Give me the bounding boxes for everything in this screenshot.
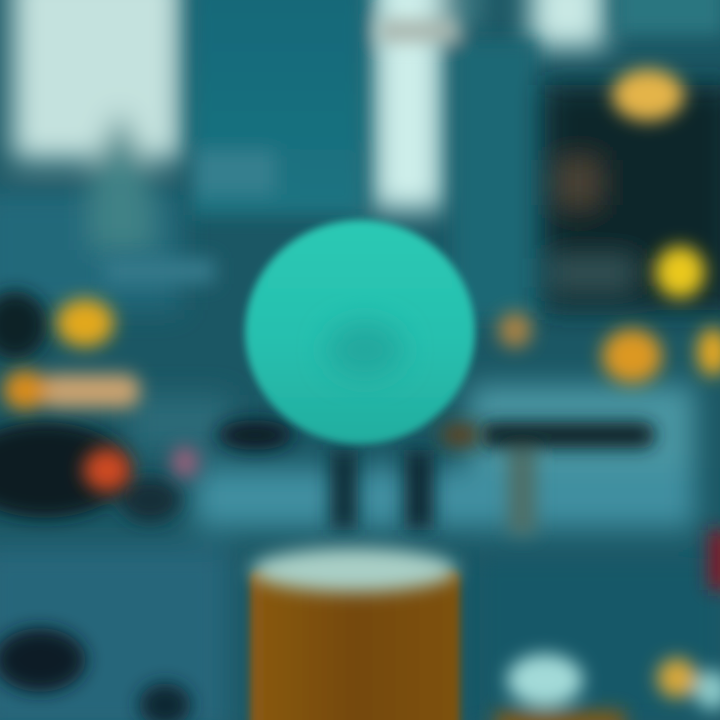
cup rim (251, 548, 457, 592)
sphere inner mark (327, 322, 403, 378)
street bands (0, 385, 720, 720)
dark silhouettes (0, 291, 655, 720)
bottom right highlights (495, 654, 720, 720)
dark right-hand building (545, 85, 720, 310)
cup body (250, 570, 460, 720)
cup (250, 548, 460, 720)
sky and distant buildings (0, 0, 605, 310)
teal sphere (245, 220, 475, 444)
tower buildings (105, 0, 720, 320)
warm lights (3, 69, 720, 590)
